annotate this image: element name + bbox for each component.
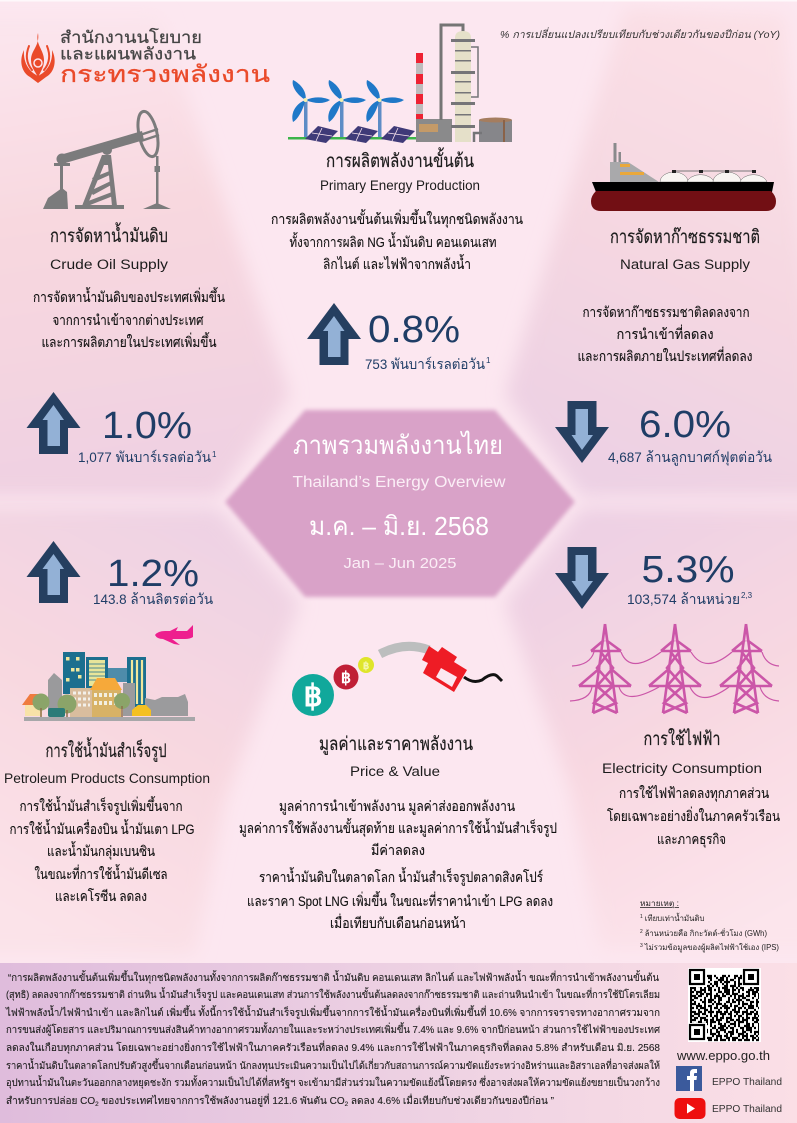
yoy note: % การเปลี่ยนแปลงเปรียบเทียบกับช่วงเดียวกันของปีก่อน (YoY) xyxy=(500,27,780,41)
summary text xyxy=(5,969,660,1108)
description: ในขณะที่การใช้น้ำมันดีเซล xyxy=(34,864,168,883)
description: ราคาน้ำมันดิบในตลาดโลก น้ำมันสำเร็จรูปตลาดสิงคโปร์ xyxy=(259,867,543,886)
summary text: 2 xyxy=(345,1101,349,1108)
heading thai: การใช้ไฟฟ้า xyxy=(644,728,720,749)
value: 0.8% xyxy=(368,309,460,351)
summary text: ไฟฟ้าพลังน้ำ/ไฟฟ้านำเข้า และลิกไนต์ เพิ่มขึ้น ทั้งนี้การใช้น้ำมันสำเร็จรูปเพิ่มขึ้นจากการใช้น้ำมันเครื่องบินที่เพิ่มขึ้นที่ 10.6% จากการจราจรทางอากาศรวมจาก xyxy=(5,1004,660,1019)
arrow up xyxy=(26,541,80,603)
icon: transmission towers xyxy=(570,624,779,713)
value: 1.0% xyxy=(102,405,192,447)
description: และน้ำมันกลุ่มเบนซิน xyxy=(47,841,155,860)
arrow down xyxy=(555,401,609,463)
logo: ministry of energy xyxy=(21,28,270,87)
description: มูลค่าการใช้พลังงานขั้นสุดท้าย และมูลค่าการใช้น้ำมันสำเร็จรูป xyxy=(239,818,557,837)
summary text: ของประเทศไทยจากการใช้พลังงานอยู่ที่ 121.6 พันตัน CO xyxy=(99,1093,345,1107)
panel: primary energy production: 1 xyxy=(486,356,491,365)
icon: youtube xyxy=(674,1098,706,1119)
icon: baht coins and fuel nozzle: ฿ xyxy=(363,661,369,672)
period thai: ม.ค. – มิ.ย. 2568 xyxy=(309,511,489,541)
footer summary panel xyxy=(0,963,797,1123)
description: และราคา Spot LNG เพิ่มขึ้น ในขณะที่ราคานำเข้า LPG ลดลง xyxy=(247,891,553,910)
icon: chimney and refinery xyxy=(416,25,512,142)
icon: facebook xyxy=(676,1066,702,1091)
description xyxy=(10,796,194,905)
heading english: Natural Gas Supply xyxy=(620,257,750,272)
footnotes: หมายเหตุ : xyxy=(640,899,679,908)
panel: electricity consumption xyxy=(555,547,780,848)
footnotes xyxy=(640,899,779,953)
icon: wind turbines and solar xyxy=(288,80,418,143)
description: การใช้น้ำมันเครื่องบิน น้ำมันเตา LPG xyxy=(10,819,194,838)
icon: city xyxy=(22,652,195,721)
footnotes: 1 xyxy=(640,914,643,920)
description xyxy=(239,799,557,932)
description: ลิกไนต์ และไฟฟ้าจากพลังน้ำ xyxy=(323,254,471,273)
summary text: (สุทธิ) ลดลงจากก๊าซธรรมชาติ ถ่านหิน น้ำมันสำเร็จรูป และคอนเดนเสท ส่วนการใช้พลังงานขั้นต้นลดลงจากก๊าซธรรมชาติ และถ่านหินนำเข้า ในขณะที่การใช้ปิโตรเลียม xyxy=(6,986,660,1001)
description xyxy=(271,209,523,273)
icon: oil pumpjack xyxy=(43,110,171,209)
description xyxy=(33,287,225,351)
description xyxy=(607,785,780,848)
panel: natural gas supply xyxy=(555,143,776,466)
description: การผลิตพลังงานขั้นต้นเพิ่มขึ้นในทุกชนิดพลังงาน xyxy=(271,209,523,228)
center hexagon panel xyxy=(225,410,575,597)
hexagon title english: Thailand’s Energy Overview xyxy=(292,474,506,491)
icon: airplane xyxy=(155,625,193,645)
unit: 1,077 พันบาร์เรลต่อวัน xyxy=(78,449,211,466)
value: 5.3% xyxy=(642,549,734,591)
icon: baht coins and fuel nozzle: ฿ xyxy=(303,680,323,713)
icon: qr code xyxy=(688,968,761,1042)
hexagon title thai: ภาพรวมพลังงานไทย xyxy=(293,430,503,460)
description: และการผลิตภายในประเทศเพิ่มขึ้น xyxy=(42,332,217,351)
description: ทั้งจากการผลิต NG น้ำมันดิบ คอนเดนเสท xyxy=(290,232,496,251)
unit: 4,687 ล้านลูกบาศก์ฟุตต่อวัน xyxy=(608,449,772,466)
unit: 143.8 ล้านลิตรต่อวัน xyxy=(93,592,213,608)
panel: crude oil supply xyxy=(26,110,225,466)
summary text: ลดลง 4.6% เมื่อเทียบกับช่วงเดียวกันของปีก่อน ” xyxy=(348,1093,555,1107)
arrow down xyxy=(555,547,609,609)
heading english: Primary Energy Production xyxy=(320,178,480,193)
description: เมื่อเทียบกับเดือนก่อนหน้า xyxy=(330,913,466,932)
heading english: Price & Value xyxy=(350,764,440,779)
unit: 103,574 ล้านหน่วย xyxy=(627,592,740,608)
arrow up xyxy=(307,303,361,365)
panel: price and value xyxy=(239,646,557,932)
panel: electricity consumption: 2,3 xyxy=(741,591,753,600)
panel: crude oil supply: 1 xyxy=(212,450,217,459)
description: จากการนำเข้าจากต่างประเทศ xyxy=(52,313,204,329)
panel: primary energy production xyxy=(271,25,523,373)
website: www.eppo.go.th xyxy=(676,1048,770,1063)
footnotes: ไม่รวมข้อมูลของผู้ผลิตไฟฟ้าใช้เอง (IPS) xyxy=(644,943,779,953)
footnotes: 2 xyxy=(640,929,643,935)
description: และการผลิตภายในประเทศที่ลดลง xyxy=(578,346,752,365)
footnotes: 3 xyxy=(640,943,643,949)
youtube label: EPPO Thailand xyxy=(712,1104,782,1115)
heading thai: การผลิตพลังงานขั้นต้น xyxy=(326,147,474,171)
heading english: Crude Oil Supply xyxy=(50,257,168,272)
heading thai: การใช้น้ำมันสำเร็จรูป xyxy=(46,737,166,762)
logo text line 2: และแผนพลังงาน xyxy=(60,46,196,64)
summary text: ลดลงในเกือบทุกภาคส่วน โดยเฉพาะอย่างยิ่งการใช้ไฟฟ้าในภาคครัวเรือนที่ลดลง 9.4% และการใช้ไฟฟ้าในภาคธุรกิจที่ลดลง 5.8% สำหรับเดือน มิ.ย. 2568 xyxy=(6,1040,660,1054)
summary text: 2 xyxy=(95,1101,99,1108)
icon: baht coins and fuel nozzle xyxy=(292,646,502,716)
icon: lng ship xyxy=(591,143,776,211)
value: 6.0% xyxy=(639,404,731,446)
description: การใช้น้ำมันสำเร็จรูปเพิ่มขึ้นจาก xyxy=(20,796,182,815)
description: มูลค่าการนำเข้าพลังงาน มูลค่าส่งออกพลังงาน xyxy=(279,799,515,815)
heading english: Electricity Consumption xyxy=(602,761,762,776)
logo text line 3: กระทรวงพลังงาน xyxy=(60,61,270,87)
description: การจัดหาก๊าซธรรมชาติลดลงจาก xyxy=(582,305,750,321)
description xyxy=(578,305,752,365)
heading english: Petroleum Products Consumption xyxy=(4,771,210,786)
description: การจัดหาน้ำมันดิบของประเทศเพิ่มขึ้น xyxy=(33,287,225,306)
period english: Jan – Jun 2025 xyxy=(344,555,456,572)
heading thai: มูลค่าและราคาพลังงาน xyxy=(319,733,473,755)
icon: baht coins and fuel nozzle: ฿ xyxy=(341,670,351,687)
value: 1.2% xyxy=(107,553,199,595)
description: และเคโรซีน ลดลง xyxy=(55,888,147,905)
description: การใช้ไฟฟ้าลดลงทุกภาคส่วน xyxy=(619,785,769,802)
summary text: อุปทานน้ำมันในตะวันออกกลางหยุดชะงัก รวมทั้งความเป็นไปได้ที่สหรัฐฯ จะเข้ามามีส่วนร่วมในความขัดแย้งนี้โดยตรง ซึ่งอาจส่งผลให้ความขัดแย้งขยายเป็นวงกว้าง xyxy=(6,1074,660,1089)
footnotes: ล้านหน่วยคือ กิกะวัตต์-ชั่วโมง (GWh) xyxy=(645,928,767,938)
icon: flame xyxy=(21,33,55,83)
summary text: สำหรับการปล่อย CO xyxy=(6,1096,97,1107)
facebook label: EPPO Thailand xyxy=(712,1077,782,1088)
logo text line 1: สำนักงานนโยบาย xyxy=(60,28,202,47)
arrow up xyxy=(26,392,80,454)
unit: 753 พันบาร์เรลต่อวัน xyxy=(365,356,485,373)
heading thai: การจัดหาก๊าซธรรมชาติ xyxy=(610,226,760,247)
description: มีค่าลดลง xyxy=(371,843,425,859)
panel: petroleum products consumption xyxy=(4,541,213,905)
heading thai: การจัดหาน้ำมันดิบ xyxy=(50,222,168,246)
description: และภาคธุรกิจ xyxy=(657,832,726,848)
footnotes: เทียบเท่าน้ำมันดิบ xyxy=(645,912,705,923)
description: การนำเข้าที่ลดลง xyxy=(616,324,714,343)
summary text: การขนส่งผู้โดยสาร และปริมาณการขนส่งสินค้าทางอากาศรวมทั้งภายในและระหว่างประเทศเพิ่มขึ้น 7.4% และ 9.6% จากปีก่อนหน้า ส่วนการใช้ไฟฟ้าของประเทศ xyxy=(6,1021,660,1036)
summary text: ราคาน้ำมันดิบในตลาดโลกปรับตัวสูงขึ้นจากเดือนก่อนหน้า นักลงทุนประเมินความเป็นไปได้เกี่ยวกับสถานการณ์ความขัดแย้งระหว่างอิหร่านและอิสราเอลที่อาจส่งผลให้ xyxy=(6,1057,660,1072)
summary text: “การผลิตพลังงานขั้นต้นเพิ่มขึ้นในทุกชนิดพลังงานทั้งจากการผลิตก๊าซธรรมชาติ น้ำมันดิบ คอนเดนเสท ลิกไนต์ และไฟฟ้าพลังน้ำ ขณะที่การนำเข้าพลังงานขั้นต้น xyxy=(8,969,659,984)
